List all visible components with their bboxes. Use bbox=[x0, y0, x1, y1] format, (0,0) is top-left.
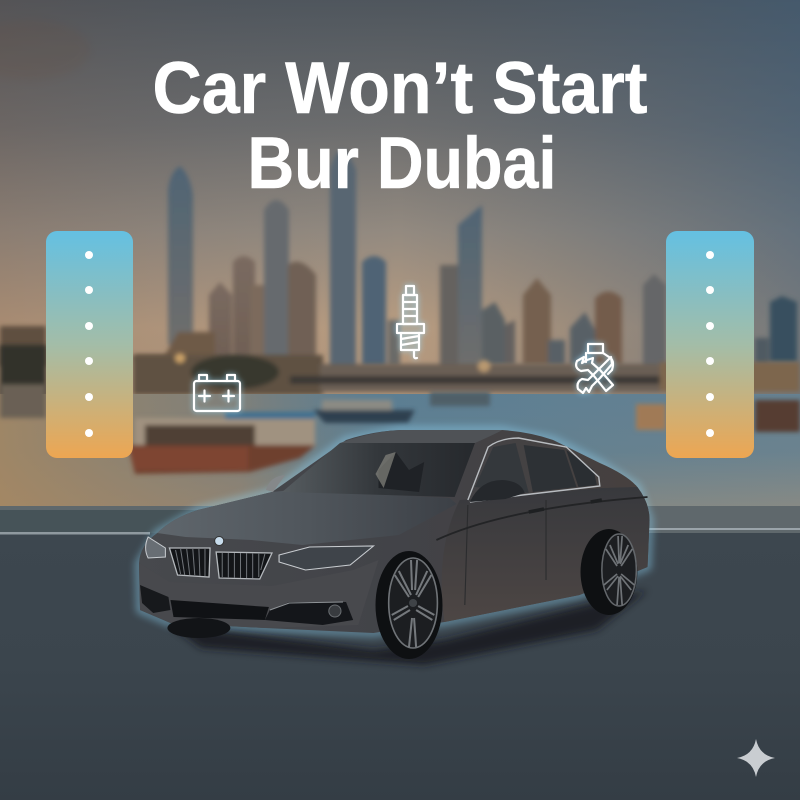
car roof bbox=[340, 430, 502, 443]
car ground shadow bbox=[170, 590, 648, 665]
side windows bbox=[475, 443, 529, 493]
title bbox=[152, 48, 648, 204]
windshield bbox=[282, 443, 475, 497]
background: creek water bbox=[0, 394, 800, 510]
wing mirrors bbox=[470, 480, 525, 502]
car bbox=[139, 430, 650, 665]
car door panels bbox=[442, 487, 650, 622]
background: shoreline and bridge bbox=[0, 345, 800, 397]
background: blurred boats bbox=[0, 384, 800, 474]
front wheel bbox=[375, 551, 442, 659]
car front bumper bbox=[139, 560, 379, 628]
panel: right bullet list bbox=[666, 231, 754, 458]
background: sky bbox=[0, 0, 800, 420]
icon: four-point sparkle bbox=[737, 739, 775, 777]
icon: car battery bbox=[194, 375, 240, 411]
car body bbox=[139, 430, 650, 633]
lower bumper intakes bbox=[140, 585, 170, 613]
title: Bur Dubai bbox=[248, 123, 556, 204]
badge bbox=[215, 536, 224, 546]
icon: spark plug bbox=[397, 286, 424, 358]
icon: crossed spanners with engine bbox=[576, 344, 613, 393]
door lines and handles bbox=[465, 500, 546, 605]
front tyre bottom bbox=[167, 618, 230, 638]
grille bbox=[169, 548, 272, 579]
background: road and kerb bbox=[0, 506, 800, 800]
panel: left bullet list bbox=[46, 231, 133, 458]
chrome window trim bbox=[468, 438, 600, 502]
rear wheel bbox=[581, 529, 637, 615]
title: Car Won’t Start bbox=[152, 48, 648, 129]
headlights bbox=[279, 546, 373, 570]
car glow bbox=[139, 430, 650, 633]
skyline of blurred towers bbox=[0, 150, 797, 375]
car hood bbox=[157, 490, 457, 545]
